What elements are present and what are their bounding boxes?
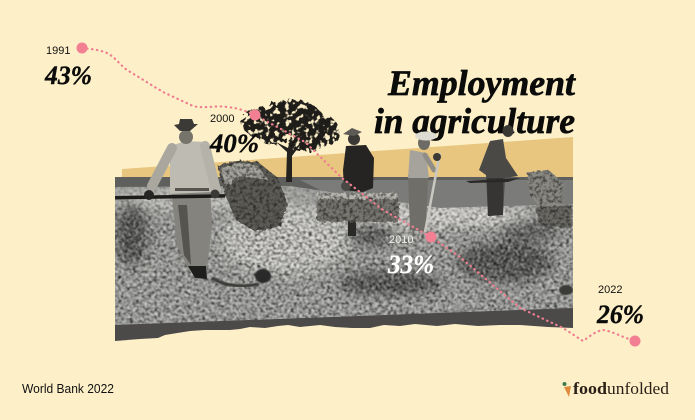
head [179,130,193,144]
icon: carrot [562,382,571,397]
data point: 2022: 2022 [598,284,622,296]
title [374,63,576,141]
data point: 2010 [387,232,436,279]
man with pitchfork [115,119,225,279]
source: World Bank 2022 [22,382,114,396]
data point: 2000: 2000 [210,113,234,125]
data point: 2000: 40% [209,129,259,158]
hay pile right [527,170,572,228]
shirt [170,141,211,194]
fork [115,194,225,199]
distant wall [115,177,573,211]
dotted trend line [82,48,635,341]
data point: 1991: 43% [44,61,92,90]
data point: 2000 [209,110,260,158]
logo: foodunfolded [562,379,670,398]
man in dark shirt [341,128,374,192]
trousers [171,188,212,270]
data point: 2010: 2010 [389,234,413,246]
data point: 2022: 26% [596,300,644,329]
data point: 1991: 1991 [46,45,70,57]
data point: 2022 [596,284,644,346]
data point: 2010: 33% [387,250,434,279]
logo: foodunfolded: unfolded [607,379,670,398]
photo: farm field [110,177,573,341]
logo: foodunfolded: food [573,379,608,398]
man with straw hat [408,132,441,232]
hay bale, ground [317,193,399,236]
grass texture [115,180,573,326]
shadows on ground [212,278,258,286]
hay bale on fork [218,160,288,232]
tan backdrop strip [122,137,573,180]
tree [242,100,339,182]
dark grass clumps [116,205,558,295]
torn dark strip [115,304,573,341]
title: Employment [387,63,576,103]
ground [110,180,573,326]
title: in agriculture [374,101,575,141]
data point: 1991 [44,42,92,90]
man bending [466,125,520,216]
